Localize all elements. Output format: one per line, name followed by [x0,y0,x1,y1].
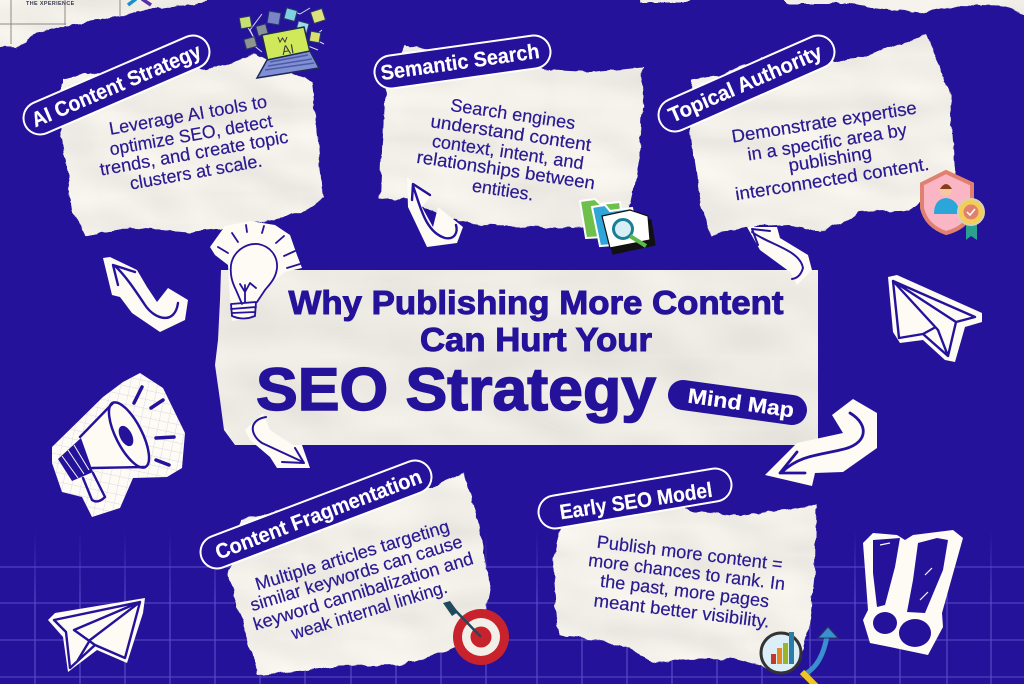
icon: ai laptop: AI [281,41,295,58]
body text: relationships between [415,147,596,193]
body text: the past, more pages [599,571,770,611]
body text [587,532,786,632]
icon: paper plane left [48,598,145,672]
body text [98,91,290,194]
body text: Search engines [449,95,577,133]
icon: ai laptop [239,8,326,78]
paper [690,34,955,235]
logo mark [128,0,151,5]
icon: folders with magnifier [580,199,655,254]
arrow: topical authority [747,227,812,285]
body text [248,516,476,644]
body text: interconnected content. [734,154,930,204]
pill heading: AI Content Strategy [28,40,205,132]
panel: center title [215,270,818,445]
body text: weak internal linking. [288,577,450,644]
panel: early seo model [553,479,838,684]
icon: double exclamation marks [863,530,963,655]
body text: publishing [787,143,873,176]
arrow: right of title [765,399,877,486]
background grid [0,530,1024,684]
body text: in a specific area by [746,120,908,165]
title [256,284,784,423]
paper [228,474,490,675]
body text [415,95,596,205]
body text: entities. [471,176,535,205]
body text: trends, and create topic [98,127,290,180]
arrow: left upper [103,257,188,332]
icon: megaphone [52,373,185,517]
body text: Publish more content = [596,532,784,574]
body text: meant better visibility. [593,590,771,632]
body text: Multiple articles targeting [253,516,452,594]
icon: expert shield with medal [922,172,984,240]
torn paper: top left with logo [0,0,220,48]
icon: paper plane right [888,275,982,362]
pill heading: Semantic Search [379,40,541,85]
pill heading: Early SEO Model [558,479,714,524]
icon: light bulb [210,221,302,321]
pill heading: Topical Authority [665,40,826,127]
paper [62,54,324,236]
arrow: bottom left of title [245,413,310,468]
pill: mind map: Mind Map [686,385,795,422]
body text: clusters at scale. [128,151,264,194]
torn paper: top right [637,0,1024,15]
center paper [215,270,818,445]
icon: target with arrow [443,601,509,665]
title: Why Publishing More Content [288,284,784,321]
body text: more chances to rank. In [587,550,786,594]
panel: ai content strategy [28,8,326,236]
body text: Leverage AI tools to [107,91,268,139]
panel: content fragmentation [212,465,509,675]
logo tagline: THE XPERIENCE [26,1,75,7]
body text [730,98,930,204]
panel: topical authority [665,34,984,240]
title: SEO Strategy [256,356,657,423]
body text: similar keywords can cause [248,531,465,615]
body text: understand content [429,111,592,155]
paper [380,44,643,228]
body text: context, intent, and [431,131,585,173]
icon: chart with magnifier and growth arrow [761,627,838,684]
body text: optimize SEO, detect [108,111,274,159]
pill heading: Content Fragmentation [212,465,425,564]
title: Can Hurt Your [420,321,652,358]
body text: keyword cannibalization and [251,548,476,634]
arrow: semantic search [407,177,463,247]
panel: semantic search [379,40,655,254]
body text: Demonstrate expertise [730,98,918,147]
paper [553,490,816,672]
